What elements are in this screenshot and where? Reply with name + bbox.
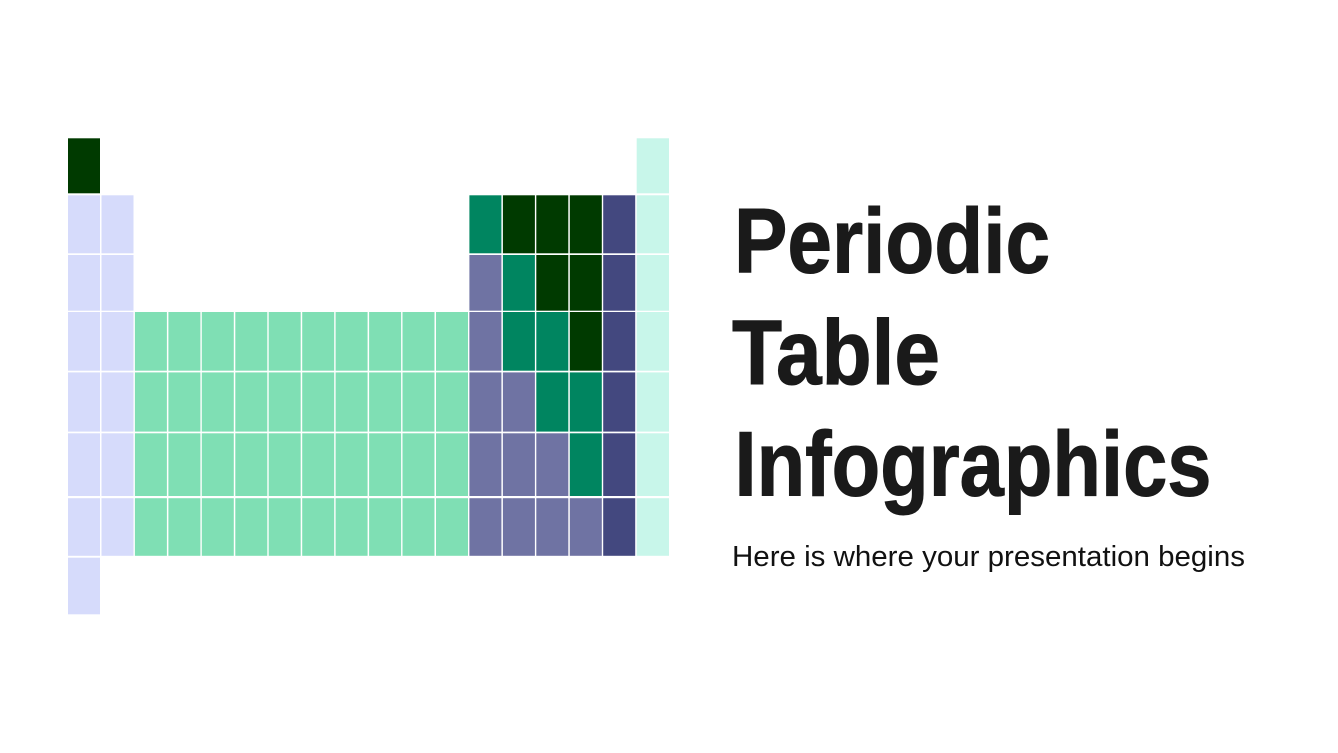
table row 7 (68, 498, 669, 556)
table row 2 (68, 195, 669, 253)
table row 8 (68, 558, 100, 614)
table row 3 (68, 255, 669, 311)
table row 6 (68, 433, 669, 496)
title: Periodic (734, 191, 1050, 293)
title (732, 191, 1212, 516)
table row 5 (68, 372, 669, 432)
subtitle: Here is where your presentation begins (732, 541, 1245, 573)
periodic table graphic (68, 138, 669, 614)
title: Infographics (734, 414, 1212, 516)
table row 1 (68, 138, 669, 193)
title: Table (732, 302, 940, 404)
table row 4 (68, 312, 669, 371)
